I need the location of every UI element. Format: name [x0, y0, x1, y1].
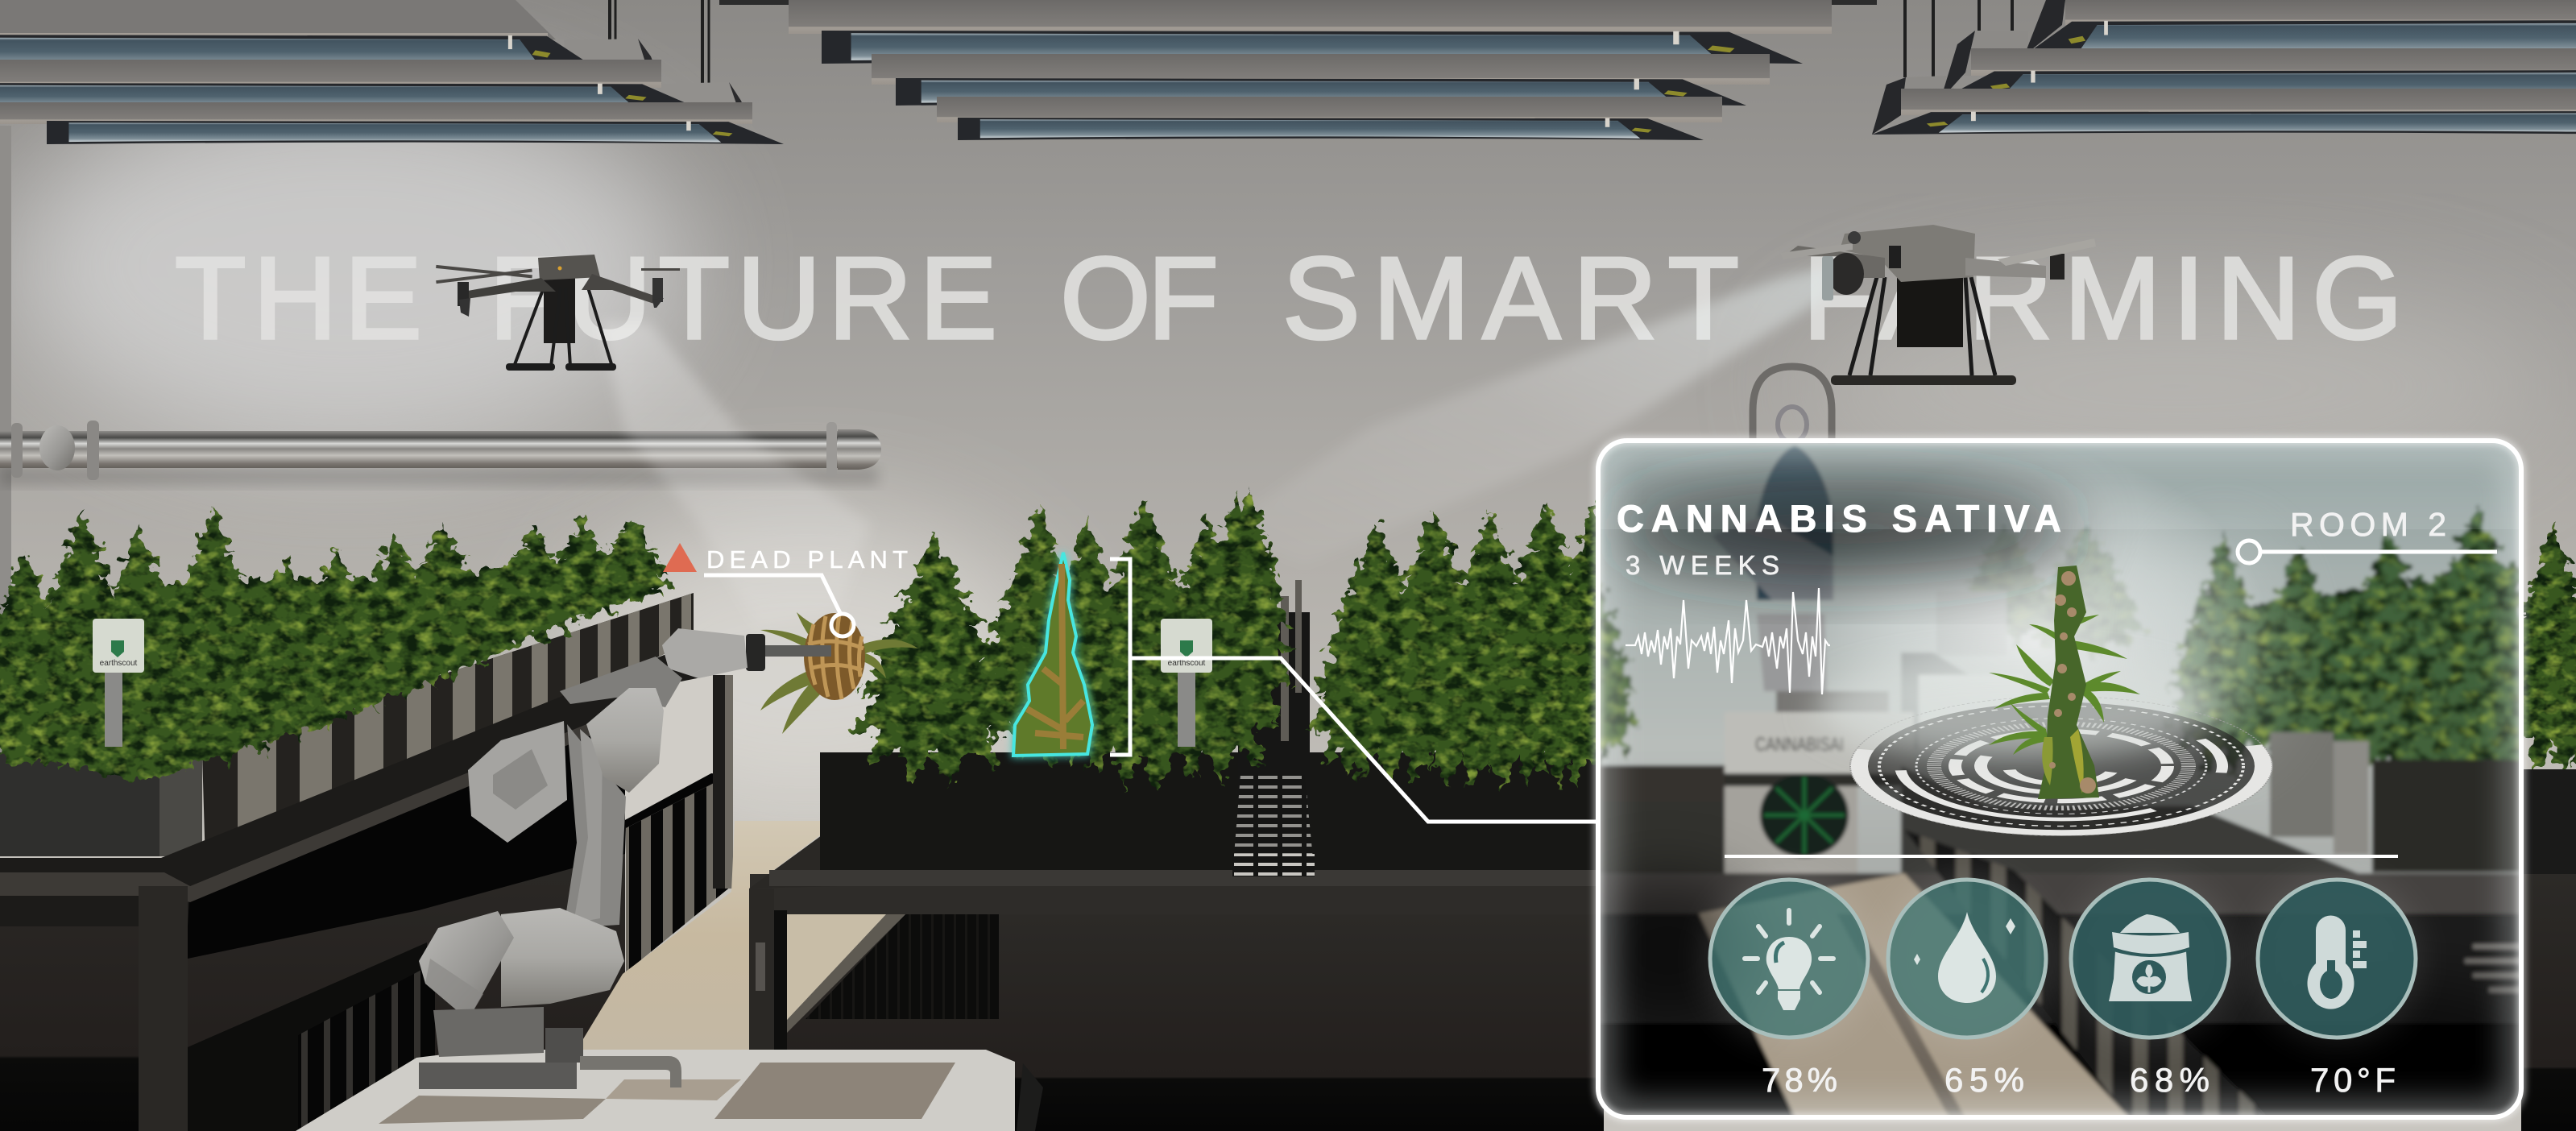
icon: water drop	[1914, 912, 2015, 1003]
panel backdrop	[1550, 441, 2560, 1118]
title: FARMING	[1803, 233, 2403, 363]
room label: ROOM 2	[2290, 506, 2446, 543]
panel divider	[1725, 855, 2398, 858]
dead plant callout	[663, 543, 908, 636]
drone light beam: right	[1216, 266, 1835, 564]
sensor: left: earthscout	[100, 659, 138, 668]
stat: light	[1704, 874, 1874, 1043]
stat values: 78%	[1762, 1061, 1837, 1099]
scan bracket and connector to panel	[1110, 559, 1600, 822]
sensor: right	[1161, 619, 1212, 747]
species heading: CANNABIS SATIVA	[1617, 497, 2061, 540]
centre rows of plants	[849, 491, 1664, 793]
left table and planters	[0, 564, 733, 1131]
floor	[577, 821, 820, 1050]
title: OF	[1060, 233, 1219, 363]
cannabis plant	[1989, 566, 2140, 799]
drone: left	[436, 255, 680, 371]
dead plant	[760, 612, 918, 734]
icon: thermometer	[2308, 915, 2367, 1009]
robot arm	[419, 628, 831, 1089]
stat: water	[1882, 874, 2052, 1043]
title	[175, 233, 2403, 363]
disc upper fade	[1812, 659, 2215, 759]
drone: right	[1780, 225, 2096, 385]
title: THE	[175, 233, 422, 363]
stat: temperature	[2252, 874, 2421, 1043]
scanned plant with cyan outline	[1013, 553, 1092, 756]
panel border	[1598, 441, 2521, 1117]
ceiling lights: right cluster	[1872, 0, 2576, 135]
title: SMART	[1282, 233, 1739, 363]
left row of plants	[0, 509, 672, 781]
ceiling lights: left cluster	[0, 0, 784, 144]
sensor: right: earthscout	[1168, 659, 1206, 668]
stat values: 65%	[1944, 1061, 2024, 1099]
right edge plants and planter	[2491, 524, 2576, 1131]
stat: nutrients	[2065, 874, 2234, 1043]
sensor: left	[93, 619, 144, 747]
oxygen hoop behind panel	[1753, 367, 1832, 451]
drone light beam: left	[600, 322, 871, 628]
panel mist	[1601, 447, 2516, 1039]
icon: light bulb	[1745, 910, 1833, 1010]
room slider	[2238, 541, 2497, 563]
stat values	[1762, 1061, 2396, 1099]
hologram disc	[1807, 682, 2316, 850]
icon: fertilizer bag	[2109, 914, 2192, 1001]
wall pipe	[0, 420, 881, 485]
stat values: 70°F	[2310, 1061, 2396, 1099]
waveform	[1626, 588, 1830, 694]
robot base platform	[296, 1050, 1043, 1131]
dead plant callout: DEAD PLANT	[706, 545, 908, 574]
panel backdrop: CANNABISAI	[1755, 734, 1844, 756]
stat values: 68%	[2130, 1061, 2209, 1099]
age label: 3 WEEKS	[1626, 550, 1779, 580]
panel: plant monitor	[1550, 441, 2560, 1128]
centre table and planters	[749, 580, 1604, 1131]
title: FUTURE	[489, 233, 997, 363]
ceiling lights: center cluster	[719, 0, 1877, 140]
inner edge glow	[1598, 441, 2521, 1117]
